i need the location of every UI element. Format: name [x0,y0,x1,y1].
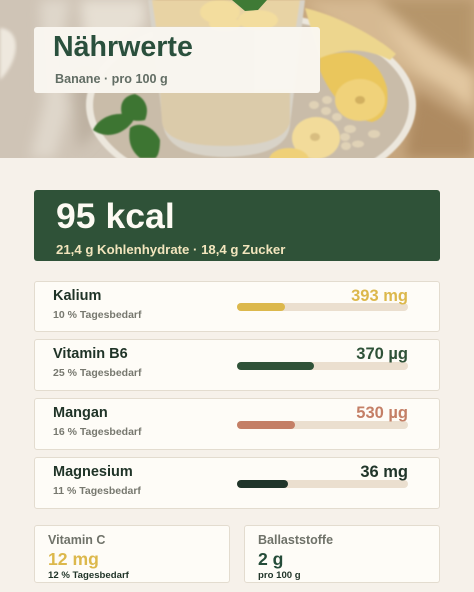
card: Vitamin C [34,525,230,583]
banana slice [269,117,340,172]
calorie panel [34,190,440,261]
amount: 393 mg [351,286,408,304]
daily value: 11 % Tagesbedarf [53,485,141,497]
nutrient row: Kalium [34,280,440,332]
value: 12 mg [48,548,99,568]
plate [86,13,416,197]
daily value: 16 % Tagesbedarf [53,426,142,438]
nutrient row: Magnesium [34,457,440,508]
title: Nährwerte [53,30,193,62]
name: Magnesium [53,464,133,480]
bar [237,362,408,370]
nutrient row: Vitamin B6 [34,339,440,390]
amount: 36 mg [360,463,408,481]
card: Ballaststoffe [244,525,440,583]
value: 2 g [258,548,283,568]
daily value: 25 % Tagesbedarf [53,367,142,379]
amount: 370 µg [356,345,408,363]
name: Vitamin B6 [53,346,128,362]
bar [237,420,408,428]
calories: 95 kcal [56,196,175,236]
note: pro 100 g [258,570,301,580]
label: Vitamin C [48,533,105,547]
nutrient row: Mangan [34,398,440,450]
subtitle: Banane · pro 100 g [55,72,168,86]
title card [34,27,320,93]
name: Mangan [53,405,108,421]
label: Ballaststoffe [258,533,333,547]
hero photo: banana smoothie on a plate [0,0,474,158]
daily value: 10 % Tagesbedarf [53,308,142,320]
oats [309,96,380,150]
name: Kalium [53,288,101,304]
carbohydrates and sugar: 21,4 g Kohlenhydrate · 18,4 g Zucker [56,242,285,256]
mint [93,94,160,158]
amount: 530 µg [356,404,408,422]
bar [237,303,408,311]
glass [148,0,305,157]
bar [237,480,408,488]
banana [305,8,396,122]
cloth [0,0,155,165]
note: 12 % Tagesbedarf [48,570,129,580]
